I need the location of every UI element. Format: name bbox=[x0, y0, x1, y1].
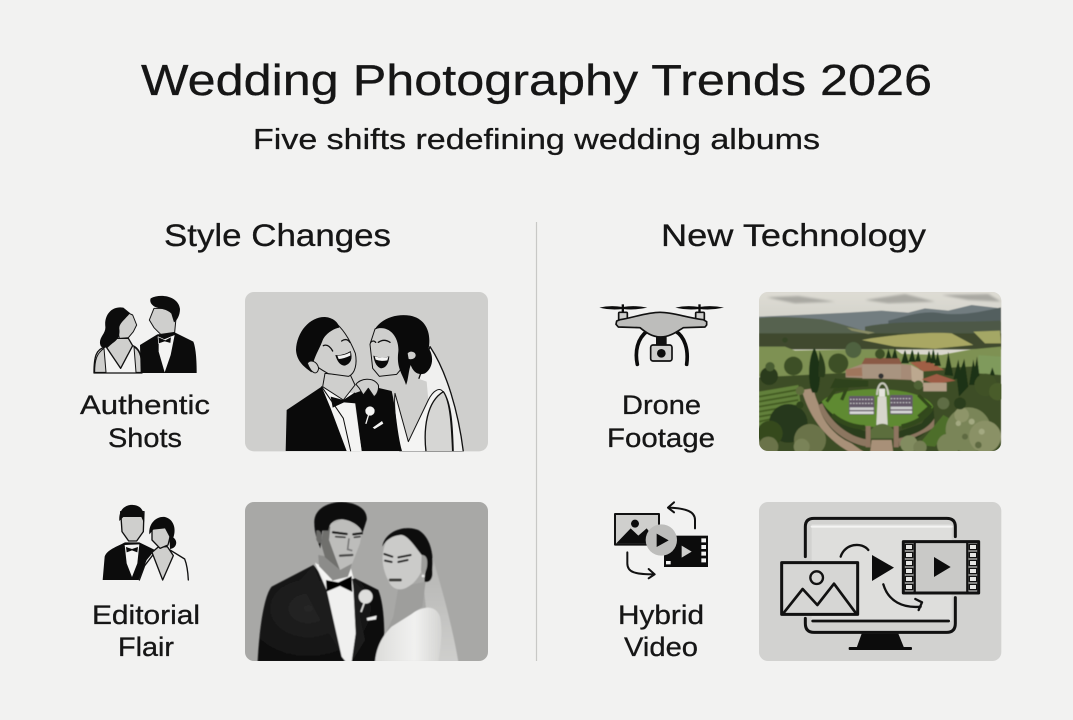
panel: hybrid video bbox=[615, 502, 1001, 662]
label: drone footage bbox=[607, 390, 715, 453]
label: editorial flair bbox=[92, 600, 200, 662]
icon: laughing couple bbox=[94, 296, 197, 373]
infographic canvas bbox=[80, 63, 1002, 661]
illustration: laughing bride and groom bbox=[245, 292, 488, 452]
label: hybrid video bbox=[618, 600, 704, 662]
label: drone footage: Footage bbox=[607, 423, 715, 453]
icon: photo to video conversion bbox=[615, 502, 708, 578]
label: authentic shots bbox=[80, 390, 210, 453]
heading: style changes: Style Changes bbox=[164, 217, 391, 253]
label: authentic shots: Shots bbox=[108, 423, 182, 453]
panel: drone footage bbox=[599, 292, 1006, 457]
photo: aerial view of Tuscan villa wedding bbox=[757, 292, 1006, 457]
icon: drone bbox=[599, 304, 724, 364]
illustration: monitor with photo and video bbox=[759, 502, 1001, 661]
label: editorial flair: Flair bbox=[118, 632, 174, 662]
title: Wedding Photography Trends 2026 bbox=[141, 56, 932, 105]
label: drone footage: Drone bbox=[622, 390, 701, 420]
photo: editorial portrait of couple bbox=[245, 502, 488, 662]
label: authentic shots: Authentic bbox=[80, 390, 210, 420]
icon: posed couple bbox=[103, 505, 188, 580]
column divider bbox=[536, 222, 538, 661]
label: editorial flair: Editorial bbox=[92, 600, 200, 630]
subtitle: Five shifts redefining wedding albums bbox=[253, 124, 820, 156]
panel: authentic shots bbox=[80, 292, 488, 453]
label: hybrid video: Hybrid bbox=[618, 600, 704, 630]
panel: editorial flair bbox=[92, 502, 488, 662]
heading: new technology: New Technology bbox=[661, 217, 926, 253]
label: hybrid video: Video bbox=[624, 632, 698, 662]
